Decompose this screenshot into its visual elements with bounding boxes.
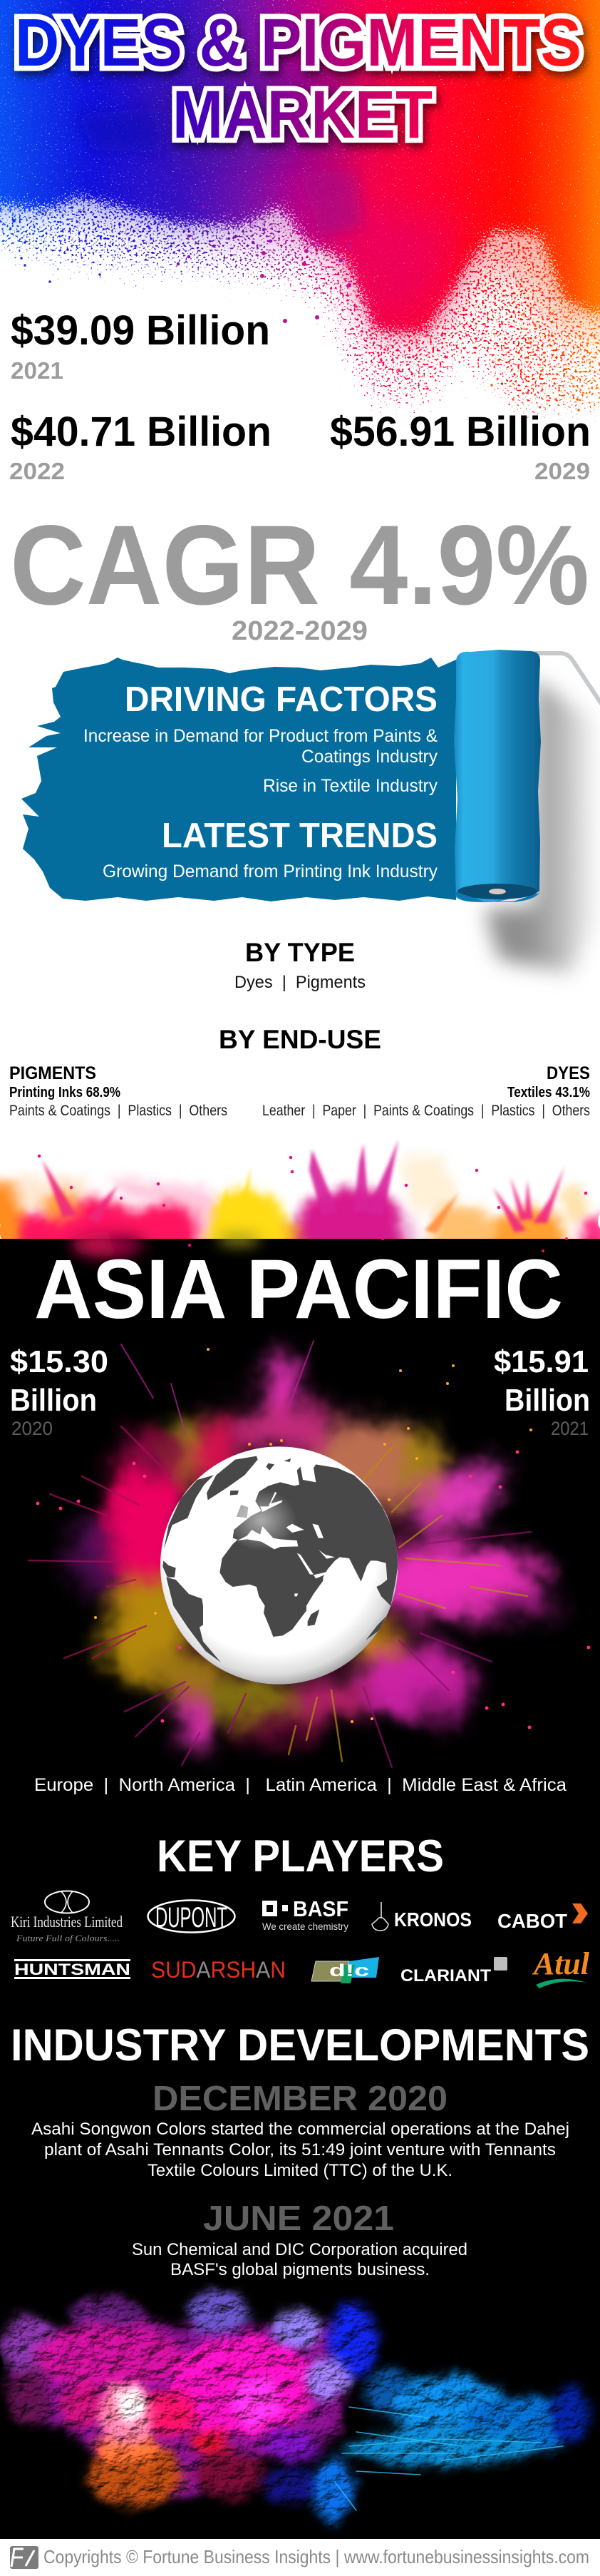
stat: Asia Pacific 2021: $15.91	[494, 1344, 589, 1379]
section: by type: Dyes | Pigments	[234, 973, 366, 992]
logo: Clariant: CLARIANT	[400, 1966, 491, 1985]
illustration: ink cloud	[1, 2291, 590, 2523]
section: by type: BY TYPE	[245, 938, 355, 967]
paint stroke shape	[21, 658, 456, 901]
driver text: Rise in Textile Industry	[263, 776, 438, 796]
pigments column: Printing Inks 68.9%	[9, 1085, 120, 1100]
illustration: colour explosion	[29, 1341, 589, 1767]
development: June 2021: Sun Chemical and DIC Corporation acquired	[132, 2240, 467, 2259]
logo: BASF	[262, 1896, 348, 1932]
heading: Asia Pacific: ASIA PACIFIC	[34, 1242, 563, 1336]
background: colour powder band	[0, 1140, 600, 1239]
logo: BASF: We create chemistry	[262, 1921, 348, 1932]
logo: Cabot	[497, 1903, 588, 1932]
powder spikes	[42, 1140, 564, 1234]
stat: 2029 market size	[330, 409, 591, 484]
logo: Huntsman	[14, 1959, 130, 1979]
pigments column: PIGMENTS	[9, 1063, 96, 1083]
powder bleed over black	[71, 1232, 567, 1257]
logo: Kiri Industries: Future Full of Colours.....	[16, 1933, 120, 1943]
roller shadow	[485, 678, 595, 973]
logo: Kiri Industries: Kiri Industries Limited	[11, 1913, 123, 1931]
logo: Huntsman: HUNTSMAN	[14, 1961, 130, 1978]
logo: BASF: BASF	[293, 1896, 348, 1921]
speckle field	[0, 0, 600, 421]
seas	[237, 1492, 335, 1596]
region list: Europe | North America | Latin America | Middle East & Africa	[34, 1775, 567, 1795]
logo: Clariant	[400, 1957, 507, 1985]
stat: Asia Pacific 2020: 2020	[11, 1418, 53, 1439]
section background: black	[0, 1239, 600, 2539]
stat: Asia Pacific 2021	[494, 1344, 590, 1439]
pigments column	[9, 1063, 227, 1119]
logo: Sudarshan: SUDARSHAN	[151, 1957, 286, 1983]
trend text: Growing Demand from Printing Ink Industry	[103, 862, 438, 881]
logo: DIC	[311, 1957, 379, 1983]
logo: Cabot: CABOT	[497, 1910, 567, 1932]
title: Dyes & Pigments Market	[15, 5, 581, 153]
driver text: Increase in Demand for Product from Paints &	[83, 726, 438, 746]
pale tint under the splash	[0, 0, 600, 342]
stat: CAGR: 2022-2029	[232, 616, 368, 646]
logo: Kronos: KRONOS	[394, 1908, 472, 1931]
stat: Asia Pacific 2020	[10, 1344, 108, 1439]
dyes column: DYES	[547, 1063, 590, 1083]
icon: paint roller	[454, 650, 600, 902]
development: December 2020: Asahi Songwon Colors started the commercial operations at the Dahej	[31, 2120, 569, 2139]
driver text: Coatings Industry	[301, 747, 438, 767]
heading: by end-use: BY END-USE	[219, 1025, 381, 1054]
continents	[162, 1456, 398, 1662]
stat: Asia Pacific 2020: Billion	[10, 1383, 97, 1418]
driver text	[83, 726, 438, 796]
stat: Asia Pacific 2020: $15.30	[10, 1344, 108, 1379]
development: June 2021	[132, 2199, 467, 2279]
stat: 2029 market size: 2029	[534, 458, 590, 484]
logo: Atul: Atul	[532, 1946, 590, 1981]
logo: Kronos	[372, 1902, 472, 1931]
section: by type	[234, 938, 366, 992]
stat: 2021 market size: $39.09 Billion	[11, 307, 270, 354]
highlight	[234, 1492, 294, 1549]
pigments column: Paints & Coatings | Plastics | Others	[9, 1103, 227, 1119]
development: December 2020: plant of Asahi Tennants Color, its 51:49 joint venture with Tennants	[44, 2140, 556, 2160]
background: colour powder splash	[0, 0, 600, 421]
paint speckles	[14, 203, 591, 410]
stat: Asia Pacific 2021: Billion	[505, 1383, 590, 1418]
stat: 2022 market size: 2022	[9, 458, 65, 484]
band droplets	[39, 1156, 586, 1207]
heading: key players: KEY PLAYERS	[157, 1831, 444, 1881]
stat: 2029 market size: $56.91 Billion	[330, 409, 591, 455]
logo: Fortune Business Insights	[10, 2546, 38, 2569]
stat: 2021 market size	[11, 307, 270, 384]
panel: paint stroke with drivers and trends	[21, 658, 456, 901]
logo: DuPont: DUPONT	[155, 1902, 227, 1933]
dyes column	[262, 1063, 590, 1119]
stat: 2022 market size: $40.71 Billion	[11, 409, 271, 455]
logo: DuPont	[148, 1900, 235, 1933]
explosion spikes	[29, 1341, 531, 1767]
development: December 2020: DECEMBER 2020	[152, 2080, 448, 2118]
title: Dyes & Pigments Market: MARKET	[172, 77, 433, 153]
logo: DIC: d!c	[329, 1961, 369, 1980]
logo: Kiri Industries	[11, 1891, 123, 1943]
logos: key players	[11, 1891, 590, 1988]
development: December 2020	[31, 2080, 569, 2180]
development: June 2021: BASF's global pigments business.	[170, 2260, 430, 2279]
ink tendrils	[335, 2407, 563, 2510]
heading: latest trends: LATEST TRENDS	[162, 817, 438, 855]
development: December 2020: Textile Colours Limited (TTC) of the U.K.	[148, 2161, 452, 2180]
icon: globe	[160, 1446, 398, 1685]
section: by end-use	[9, 1025, 590, 1119]
stat: 2022 market size	[9, 409, 271, 484]
dense colour core	[0, 0, 600, 329]
footer	[0, 2539, 600, 2576]
development: June 2021: JUNE 2021	[203, 2199, 394, 2238]
stat: Asia Pacific 2021: 2021	[551, 1418, 589, 1439]
stat: 2021 market size: 2021	[11, 357, 63, 384]
heading: driving factors: DRIVING FACTORS	[125, 680, 438, 719]
explosion droplets	[38, 1349, 589, 1727]
